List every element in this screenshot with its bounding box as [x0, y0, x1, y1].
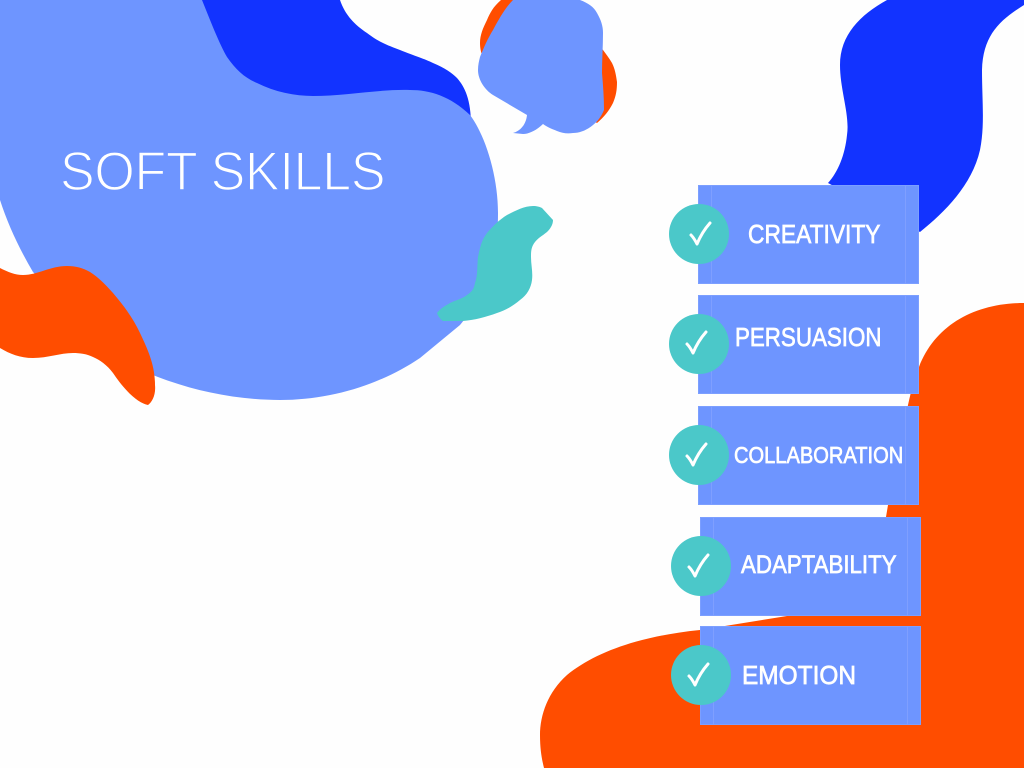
item: creativity — [669, 185, 919, 284]
item: adaptability — [671, 517, 921, 616]
item: emotion — [671, 626, 921, 725]
item: persuasion — [669, 295, 919, 394]
blob: dark blue top right — [828, 0, 1024, 232]
label: emotion: EMOTION — [742, 660, 856, 690]
label: creativity: CREATIVITY — [748, 219, 880, 249]
panel: persuasion — [698, 295, 919, 394]
blob: main periwinkle — [0, 0, 498, 400]
icon: check — [669, 314, 729, 374]
icon: check — [669, 204, 729, 264]
title: SOFT SKILLS — [60, 140, 385, 202]
blob: orange left — [0, 266, 155, 405]
blob: orange behind speech bubble — [480, 0, 617, 123]
label: persuasion: PERSUASION — [735, 322, 881, 352]
panel: emotion — [700, 626, 921, 725]
panel: adaptability — [700, 517, 921, 616]
item: collaboration — [669, 406, 919, 505]
label: adaptability: ADAPTABILITY — [741, 551, 897, 579]
blob: orange bottom right — [540, 303, 1024, 768]
icon: check — [671, 536, 731, 596]
icon: check — [671, 645, 731, 705]
panel: collaboration — [698, 406, 919, 505]
blob: dark blue top centre — [190, 0, 471, 130]
blob: teal wave — [437, 206, 553, 321]
label: collaboration: COLLABORATION — [734, 442, 903, 468]
icon: speech bubble — [478, 0, 604, 134]
icon: check — [669, 425, 729, 485]
panel: creativity — [698, 185, 919, 284]
